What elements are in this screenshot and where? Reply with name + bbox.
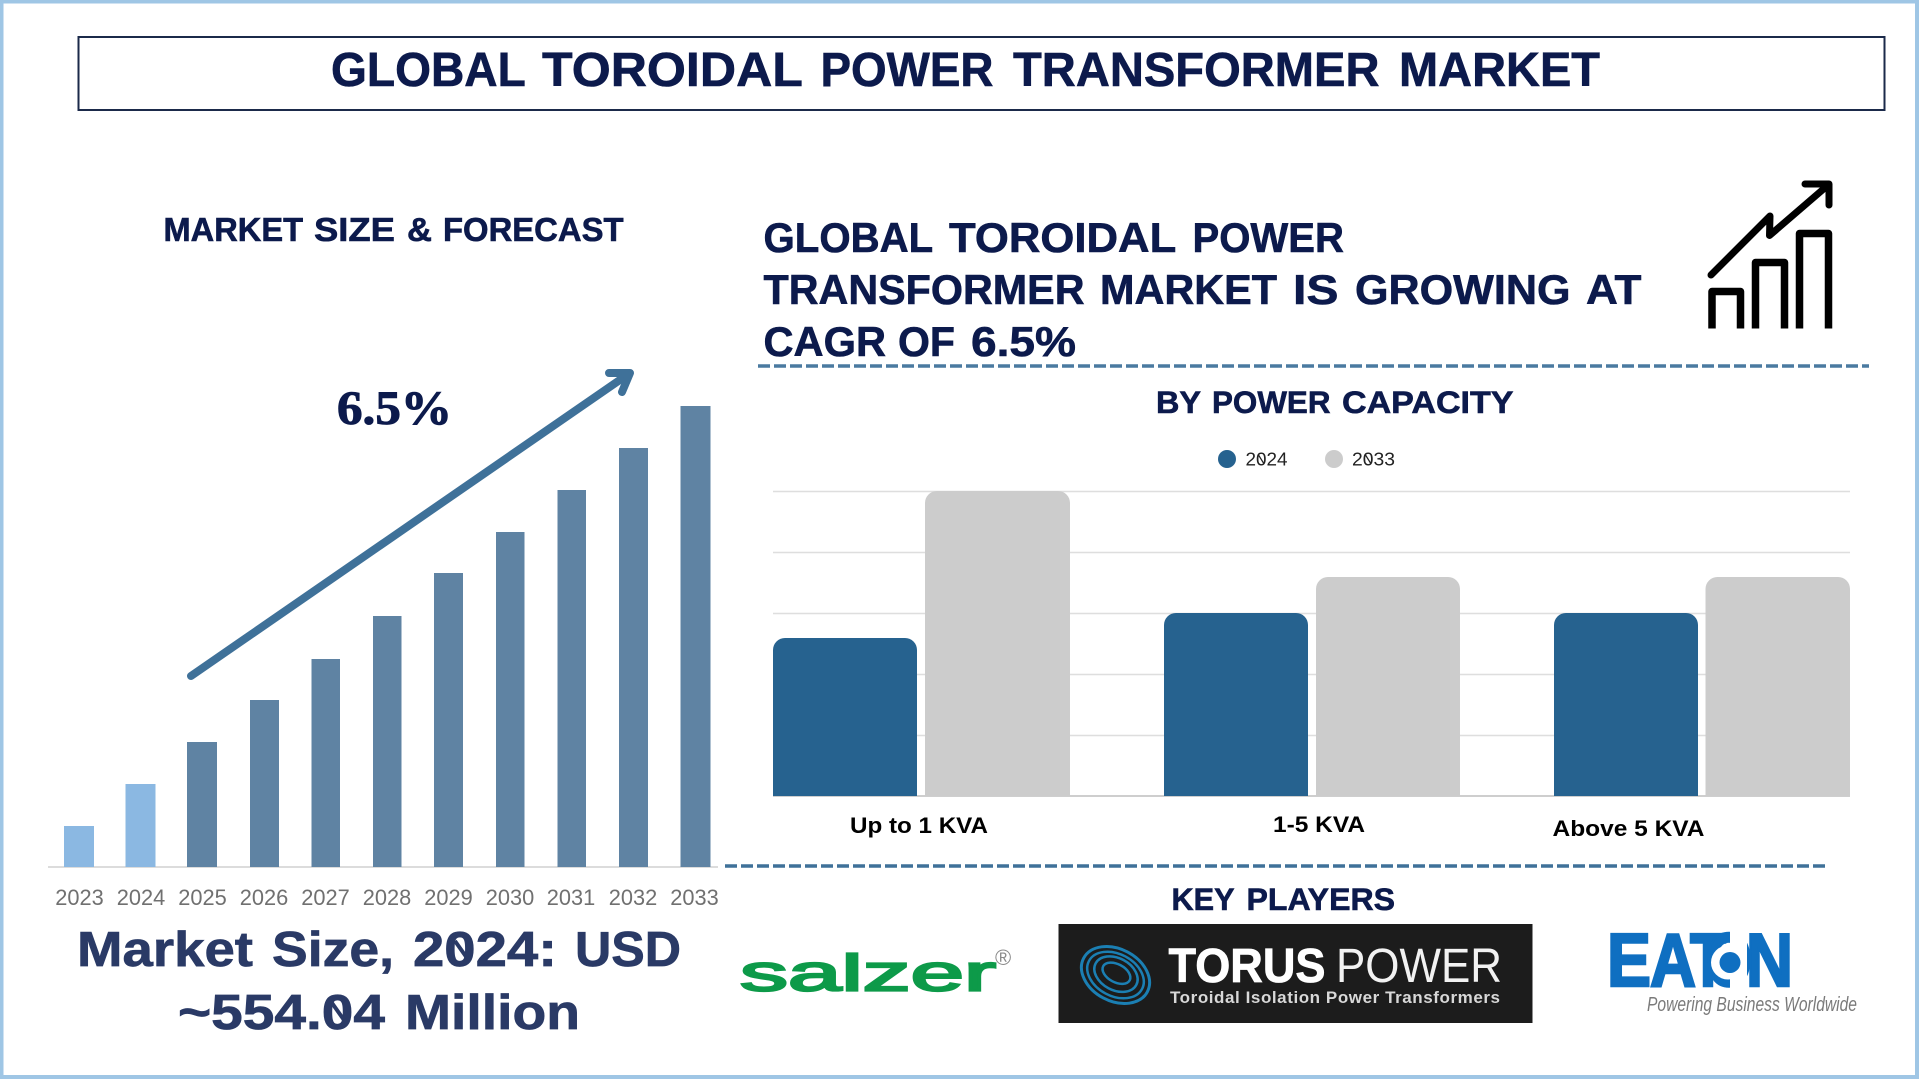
clustered bars: [773, 491, 1850, 796]
icon: rising bar chart with arrow: [1711, 184, 1829, 328]
heading: market size and forecast: FORECAST: [443, 211, 624, 248]
logo: torus power: TORUS: [1168, 940, 1326, 993]
heading: market size and forecast: MARKET: [164, 211, 303, 248]
market size callout: 2024:: [413, 923, 557, 977]
divider: [758, 364, 1869, 368]
legend: 2033: [1352, 450, 1395, 470]
market size callout: Market: [77, 923, 253, 977]
year labels: 2024: [117, 885, 165, 910]
growth arrow: [191, 373, 630, 676]
year labels: 2030: [486, 885, 534, 910]
year labels: 2029: [424, 885, 473, 910]
heading: by power capacity: BY: [1156, 384, 1201, 420]
headline: growth statement: MARKET: [1100, 266, 1278, 313]
heading: by power capacity: CAPACITY: [1342, 384, 1514, 420]
heading: market size and forecast: &: [407, 211, 432, 248]
logo: torus power: [1058, 924, 1532, 1023]
headline: growth statement: TOROIDAL: [949, 214, 1176, 261]
year labels: 2031: [547, 885, 595, 910]
year labels: 2023: [55, 885, 104, 910]
CAGR label: 6.5%: [337, 382, 452, 435]
logo: salzer: salzer: [740, 944, 996, 1002]
category labels: 1-5 KVA: [1273, 812, 1365, 837]
market size callout: Million: [405, 986, 580, 1040]
headline: growth statement: OF: [898, 318, 955, 365]
title banner: TOROIDAL: [542, 44, 802, 97]
logo: eaton: A: [1650, 918, 1696, 1002]
title banner: GLOBAL: [331, 44, 525, 97]
headline: growth statement: CAGR: [764, 318, 886, 365]
headline: growth statement: 6.5%: [971, 318, 1076, 365]
year labels: 2026: [240, 885, 288, 910]
category labels: Above 5 KVA: [1552, 816, 1705, 841]
icon: toroid rings: [1072, 935, 1159, 1015]
heading: by power capacity: POWER: [1212, 384, 1331, 420]
category labels: Up to 1 KVA: [850, 813, 988, 838]
market size callout: ~554.04: [178, 986, 385, 1040]
legend: 2024: [1246, 450, 1288, 470]
headline: growth statement: GROWING: [1355, 266, 1570, 313]
market size callout: USD: [575, 923, 681, 977]
heading: key players: KEY: [1172, 881, 1235, 917]
category labels: [850, 812, 1705, 841]
title banner: [78, 37, 1884, 110]
year labels: [55, 885, 719, 910]
logo: torus power: POWER: [1336, 940, 1502, 993]
headline: growth statement: TRANSFORMER: [764, 266, 1084, 313]
legend: [1218, 450, 1395, 470]
gridlines: [773, 492, 1850, 796]
headline: growth statement: IS: [1293, 266, 1338, 313]
heading: key players: PLAYERS: [1246, 881, 1395, 917]
year labels: 2028: [363, 885, 411, 910]
bar chart: market size forecast 2023-2033: [48, 406, 719, 910]
logo: eaton: [1607, 918, 1857, 1016]
headline: growth statement: AT: [1586, 266, 1642, 313]
year labels: 2025: [178, 885, 227, 910]
logo: salzer: ®: [995, 945, 1011, 970]
market size callout: [77, 923, 681, 1040]
title banner: TRANSFORMER: [1013, 44, 1380, 97]
logo: eaton: O: [1706, 918, 1752, 1002]
logo: salzer: [740, 944, 1011, 1002]
bars: [64, 406, 710, 867]
year labels: 2027: [301, 885, 350, 910]
title banner: POWER: [820, 44, 994, 97]
logo: torus power: Toroidal Isolation Power Transformers: [1170, 988, 1500, 1007]
logo: eaton: Powering Business Worldwide: [1647, 994, 1857, 1016]
logo: eaton: N: [1746, 918, 1793, 1002]
title banner: MARKET: [1399, 44, 1600, 97]
panel: by power capacity: [773, 384, 1850, 841]
axis line: [48, 866, 718, 868]
headline: growth statement: [764, 214, 1642, 365]
year labels: 2033: [670, 885, 719, 910]
heading: market size and forecast: SIZE: [314, 211, 395, 248]
headline: growth statement: POWER: [1192, 214, 1344, 261]
market size callout: Size,: [272, 923, 394, 977]
headline: growth statement: GLOBAL: [764, 214, 933, 261]
divider: [725, 864, 1828, 868]
logo: eaton: E: [1607, 918, 1651, 1002]
year labels: 2032: [609, 885, 657, 910]
logo: eaton: T: [1690, 918, 1726, 1002]
